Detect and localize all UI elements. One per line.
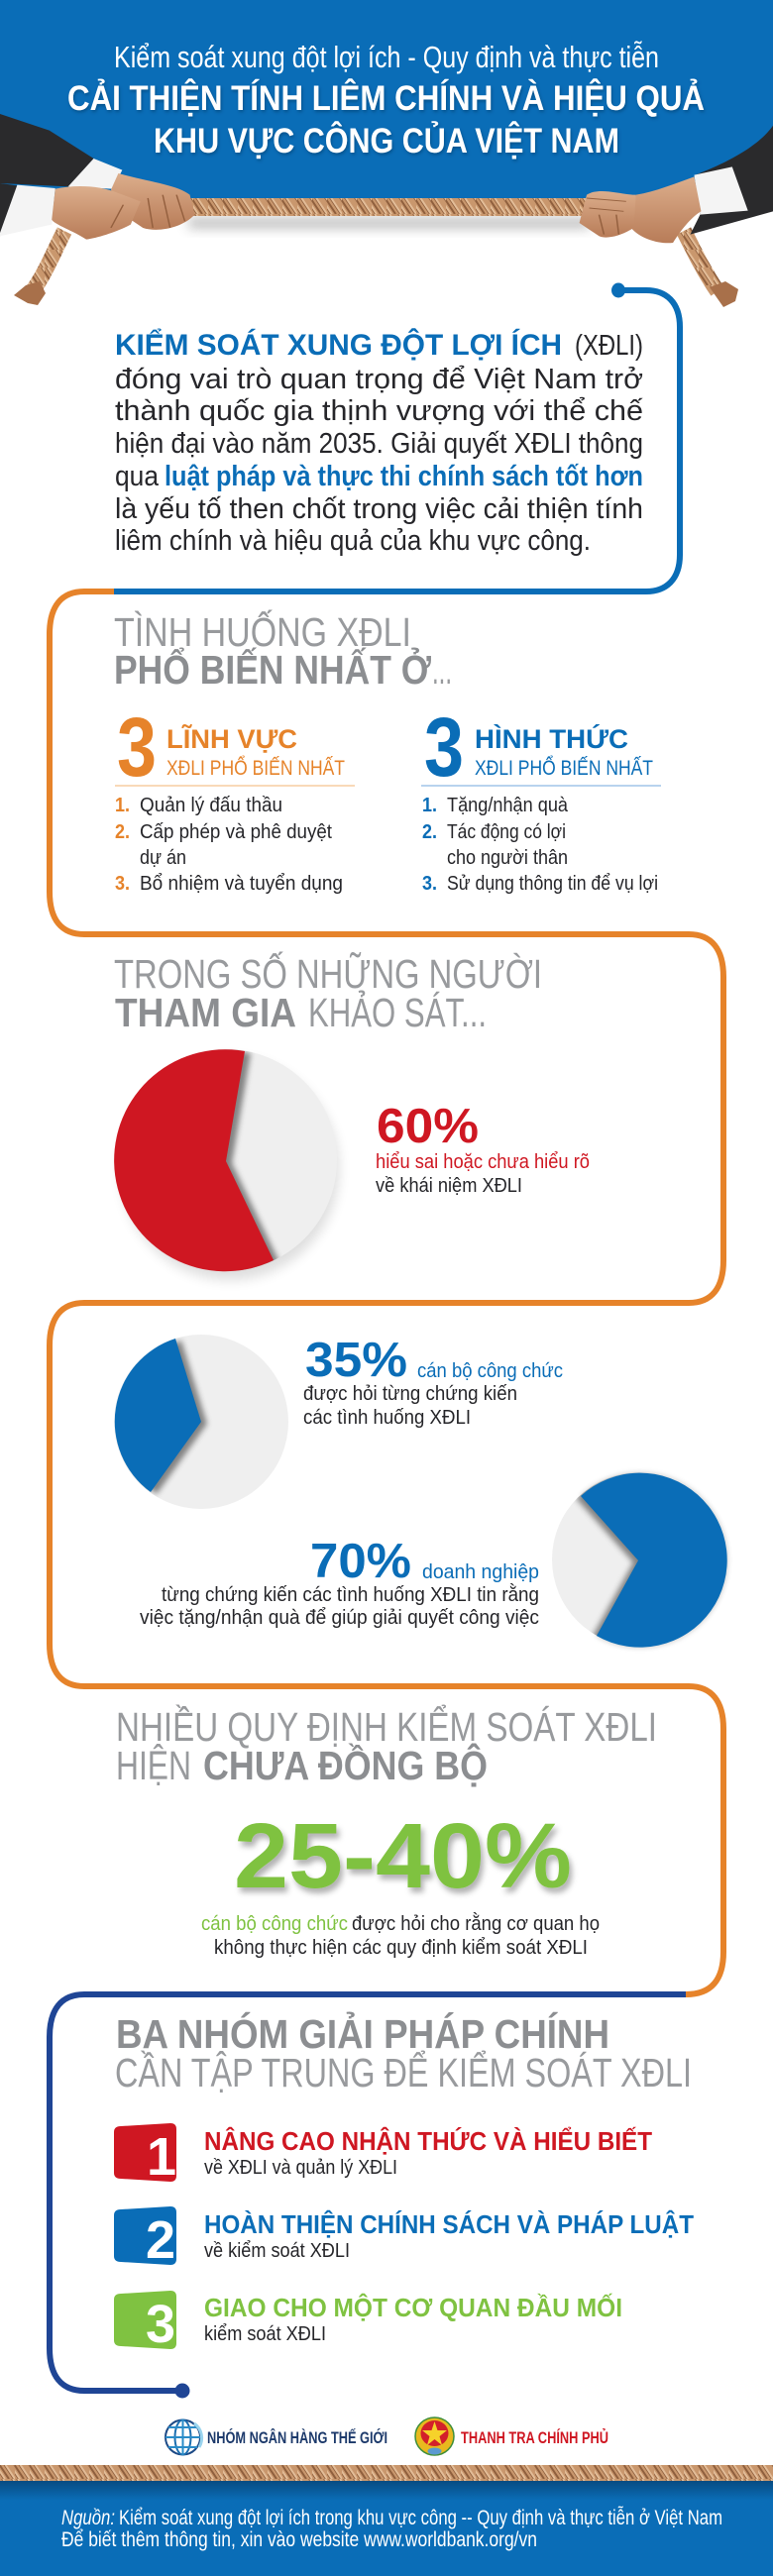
right hands pulling rope — [580, 126, 773, 243]
column: 3 forms: Tặng/nhận quà — [447, 794, 569, 816]
subtitle: Kiểm soát xung đột lợi ích - Quy định và thực tiễn — [114, 40, 659, 74]
solution 3: GIAO CHO MỘT CƠ QUAN ĐẦU MỐI — [204, 2293, 622, 2322]
column: 3 forms: 3 — [424, 700, 464, 794]
icon: Government Inspectorate emblem — [415, 2417, 454, 2455]
column: 3 forms: Tác động có lợi — [447, 820, 566, 843]
connector line: intro panel frame — [114, 283, 680, 591]
column: 3 sectors: 3 — [117, 700, 157, 794]
intro text block: KIỂM SOÁT XUNG ĐỘT LỢI ÍCH — [115, 328, 562, 362]
panel: 35% and 70% — [114, 1334, 727, 1650]
source note: Nguồn: — [61, 2507, 115, 2529]
callout: 60%: 60% — [377, 1100, 479, 1153]
column: 3 forms: HÌNH THỨC — [475, 723, 628, 754]
left hands pulling rope — [0, 114, 195, 240]
callout: 35%: các tình huống XĐLI — [303, 1406, 471, 1429]
panel: three solution groups — [114, 2011, 694, 2354]
solution 3 — [114, 2291, 622, 2354]
source note: Để biết thêm thông tin, xin vào website www.worldbank.org/vn — [61, 2528, 537, 2551]
callout: 35%: 35% — [305, 1334, 407, 1387]
column: 3 forms: 2. — [422, 820, 437, 843]
caption — [201, 1912, 600, 1959]
solution 1: NÂNG CAO NHẬN THỨC VÀ HIỂU BIẾT — [204, 2126, 652, 2156]
callout: 70%: việc tặng/nhận quà để giúp giải quyết công việc — [140, 1606, 539, 1629]
caption: không thực hiện các quy định kiểm soát XĐLI — [214, 1936, 588, 1959]
heading: TRONG SỐ NHỮNG NGƯỜI — [114, 951, 542, 997]
panel: common COI situations — [114, 609, 661, 895]
callout: 70%: 70% — [310, 1535, 411, 1588]
heading: KHẢO SÁT... — [308, 990, 487, 1035]
caption: cán bộ công chức — [201, 1912, 348, 1935]
solution 3: kiểm soát XĐLI — [204, 2322, 326, 2345]
solution 2: 2 — [146, 2210, 175, 2270]
solution 2: HOÀN THIỆN CHÍNH SÁCH VÀ PHÁP LUẬT — [204, 2209, 694, 2239]
column: 3 forms: 3. — [422, 872, 437, 895]
intro text block: là yếu tố then chốt trong việc cải thiện tính — [115, 493, 643, 525]
column: 3 sectors: 3. — [115, 872, 130, 895]
callout: 70%: từng chứng kiến các tình huống XĐLI tin rằng — [162, 1583, 539, 1606]
solution 1 — [114, 2123, 652, 2187]
rope shadow — [188, 218, 590, 228]
callout: 70%: doanh nghiệp — [422, 1560, 539, 1583]
heading — [114, 609, 452, 693]
column: 3 sectors: 1. — [115, 794, 130, 816]
source note — [61, 2507, 722, 2551]
heading: ... — [432, 647, 452, 693]
main title: CẢI THIỆN TÍNH LIÊM CHÍNH VÀ HIỆU QUẢ — [67, 78, 705, 118]
heading — [116, 1703, 657, 1788]
column: 3 sectors: LĨNH VỰC — [166, 723, 297, 754]
intro text block: qua — [115, 461, 160, 492]
caption: được hỏi cho rằng cơ quan họ — [352, 1912, 600, 1935]
column: 3 sectors: dự án — [140, 846, 186, 869]
World Bank name: NHÓM NGÂN HÀNG THẾ GIỚI — [207, 2428, 387, 2447]
callout: 60% — [376, 1100, 590, 1197]
heading: THAM GIA — [115, 990, 296, 1035]
Inspectorate name: THANH TRA CHÍNH PHỦ — [461, 2428, 608, 2447]
solution 2: về kiểm soát XĐLI — [204, 2239, 350, 2262]
column: 3 sectors: 2. — [115, 820, 130, 843]
heading: NHIỀU QUY ĐỊNH KIỂM SOÁT XĐLI — [116, 1703, 657, 1750]
footer — [0, 2465, 773, 2576]
header banner — [0, 0, 773, 307]
callout: 60%: về khái niệm XĐLI — [376, 1174, 522, 1197]
heading: CHƯA ĐỒNG BỘ — [203, 1743, 488, 1788]
intro text block: luật pháp và thực thi chính sách tốt hơn — [165, 461, 643, 492]
intro text block: thành quốc gia thịnh vượng với thể chế — [115, 395, 643, 427]
column: 3 sectors — [115, 700, 355, 895]
heading — [114, 951, 542, 1035]
pie chart: 60% — [114, 1049, 339, 1280]
column: 3 forms: Sử dụng thông tin để vụ lợi — [447, 872, 658, 895]
intro text block — [115, 328, 643, 557]
heading: BA NHÓM GIẢI PHÁP CHÍNH — [116, 2011, 609, 2057]
callout: 35%: cán bộ công chức — [417, 1359, 563, 1382]
column: 3 forms: XĐLI PHỔ BIẾN NHẤT — [475, 756, 653, 780]
heading: HIỆN — [116, 1743, 191, 1788]
logos — [166, 2417, 608, 2455]
intro text block: liêm chính và hiệu quả của khu vực công. — [115, 525, 591, 557]
column: 3 sectors: Cấp phép và phê duyệt — [140, 820, 332, 843]
main title — [67, 78, 705, 161]
heading: PHỔ BIẾN NHẤT Ở — [114, 646, 431, 693]
panel: survey 60% — [114, 951, 590, 1280]
intro text block: đóng vai trò quan trọng để Việt Nam trở — [115, 364, 643, 395]
header rope — [14, 198, 738, 307]
callout: 70% — [140, 1535, 539, 1629]
solution 2 — [114, 2206, 694, 2270]
connector line: orange frames — [50, 591, 723, 1994]
callout: 35%: được hỏi từng chứng kiến — [303, 1382, 517, 1405]
big number: 25-40%: 25-40% — [234, 1804, 572, 1907]
column: 3 sectors: Quản lý đấu thầu — [140, 794, 282, 816]
callout: 35% — [303, 1334, 563, 1429]
column: 3 forms: cho người thân — [447, 846, 568, 869]
column: 3 forms — [421, 700, 661, 895]
solution 3: 3 — [146, 2295, 175, 2354]
connector line: navy frame — [50, 1994, 686, 2398]
pie chart: 35% — [114, 1335, 288, 1509]
icon: World Bank globe — [166, 2419, 202, 2455]
column: 3 sectors: Bổ nhiệm và tuyển dụng — [140, 872, 343, 895]
pie chart: 70% — [552, 1472, 727, 1650]
main title: KHU VỰC CÔNG CỦA VIỆT NAM — [154, 121, 619, 161]
footer rope — [0, 2465, 773, 2481]
column: 3 sectors: XĐLI PHỔ BIẾN NHẤT — [166, 756, 345, 780]
intro text block: (XĐLI) — [575, 330, 643, 362]
solution 1: 1 — [147, 2127, 176, 2187]
heading — [115, 2011, 692, 2095]
column: 3 forms: 1. — [422, 794, 437, 816]
panel: unsynchronised regulations — [116, 1703, 657, 1959]
intro text block: hiện đại vào năm 2035. Giải quyết XĐLI thông — [115, 428, 643, 460]
callout: 60%: hiểu sai hoặc chưa hiểu rõ — [376, 1150, 590, 1173]
solution 1: về XĐLI và quản lý XĐLI — [204, 2156, 397, 2179]
heading: TÌNH HUỐNG XĐLI — [114, 609, 411, 655]
